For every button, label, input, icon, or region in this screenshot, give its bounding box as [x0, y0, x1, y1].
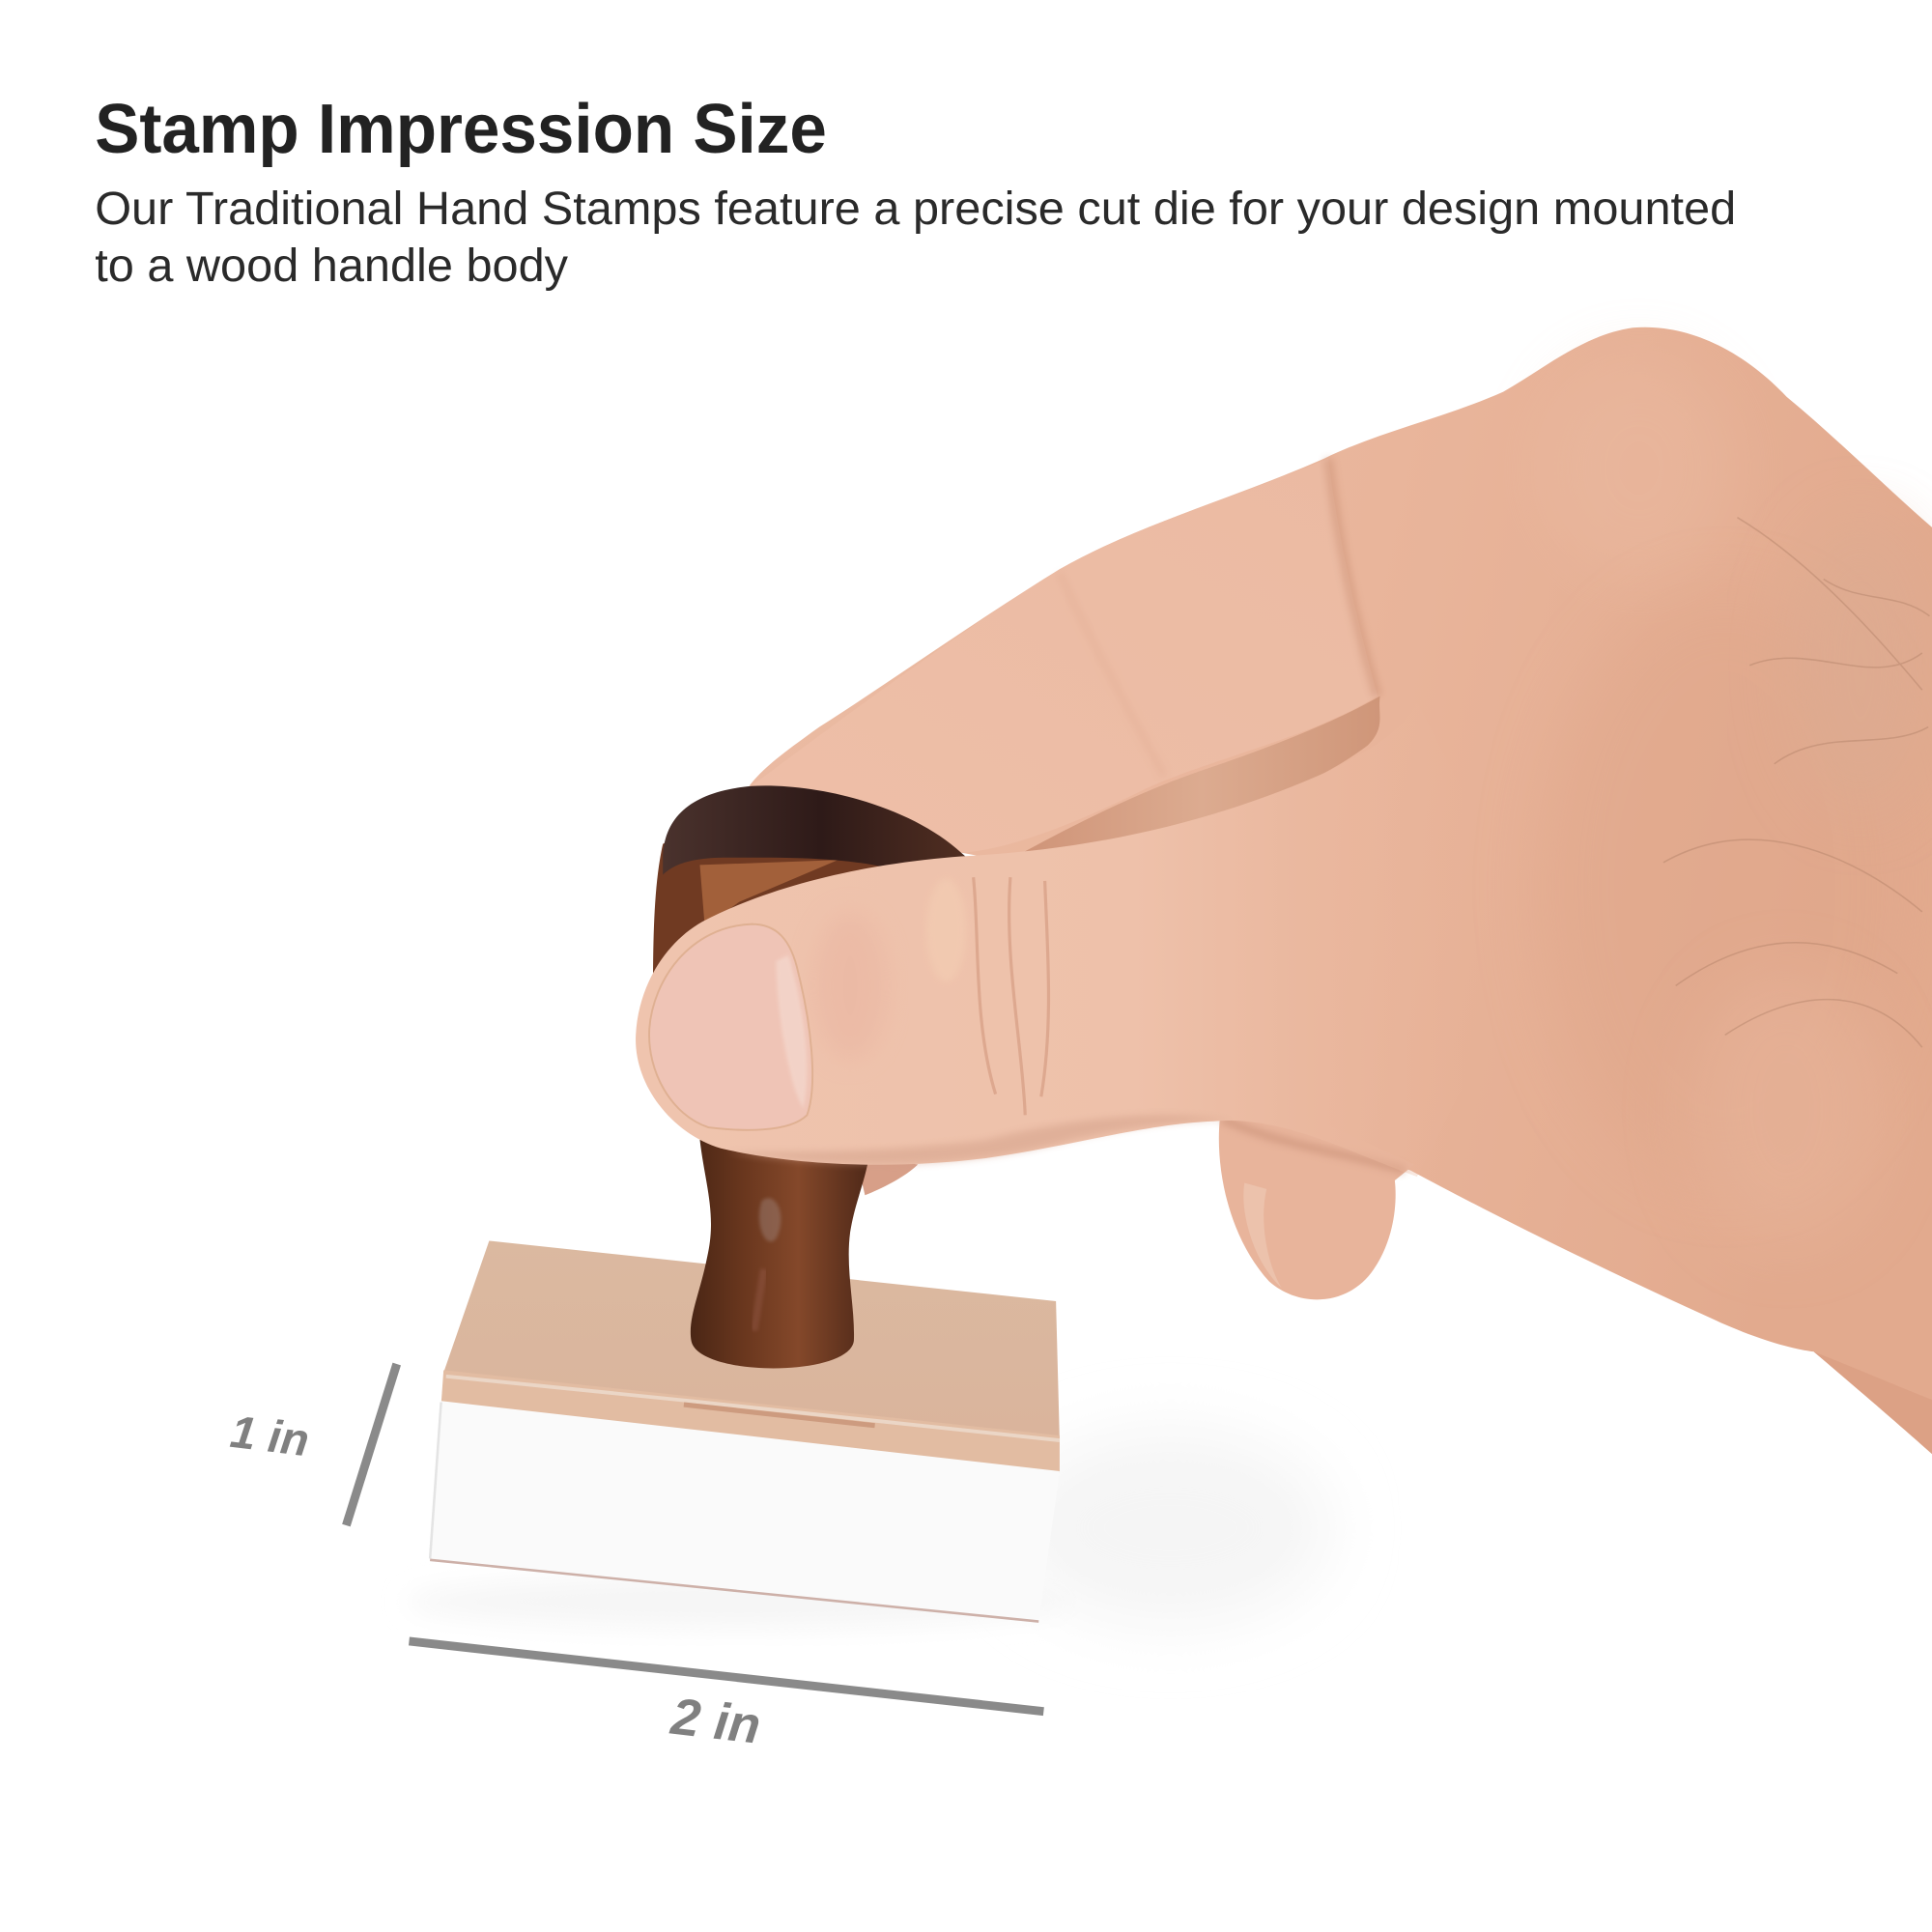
- rear finger behind thumb: [856, 1158, 918, 1195]
- stamp: strip highlight: [446, 1377, 1060, 1440]
- thumb: knuckle folds: [974, 877, 1048, 1115]
- thumb: nail highlight: [777, 955, 807, 1109]
- little finger: [1219, 1115, 1414, 1299]
- thumb: nail: [649, 924, 812, 1130]
- height label: 1 in: [228, 1406, 312, 1466]
- thumb: lower shading: [727, 1115, 1233, 1165]
- stamp body: [430, 1240, 1060, 1622]
- stamp: strip colour marks: [684, 1405, 875, 1426]
- handle: brown neck: [653, 826, 906, 1005]
- description text: [95, 183, 1736, 292]
- wrist underside: [1814, 1351, 1932, 1454]
- stamp: white die face: [430, 1401, 1060, 1622]
- skin tone patches on back of hand: [1540, 357, 1932, 1244]
- wood handle stem: [691, 1140, 870, 1368]
- thumb: main shape: [636, 702, 1540, 1177]
- stamp cast shadow: [407, 1430, 1331, 1629]
- stamp: clear edge strip: [441, 1370, 1060, 1472]
- width label: 2 in: [668, 1689, 763, 1755]
- width dimension line: [409, 1641, 1043, 1712]
- thumb: warm pink behind nail: [813, 912, 887, 1060]
- handle: dark cap: [663, 785, 980, 875]
- thumb: knuckle highlight: [926, 878, 966, 982]
- height dimension line: [346, 1364, 397, 1525]
- stamp: die bottom edge: [430, 1560, 1038, 1622]
- stamp: die outline: [430, 1403, 441, 1559]
- middle finger shadow area: [1023, 696, 1380, 853]
- thumb: [636, 702, 1540, 1177]
- handle: lighter wood grain: [699, 860, 838, 926]
- stamp: wood top face: [443, 1240, 1060, 1441]
- wood handle head: [653, 785, 980, 1005]
- title: Stamp Impression Size: [95, 90, 827, 168]
- description text: Our Traditional Hand Stamps feature a precise cut die for your design mounted: [95, 183, 1736, 235]
- back of hand base: [750, 327, 1932, 1454]
- description text: to a wood handle body: [95, 240, 569, 292]
- index finger shading: [752, 458, 1378, 853]
